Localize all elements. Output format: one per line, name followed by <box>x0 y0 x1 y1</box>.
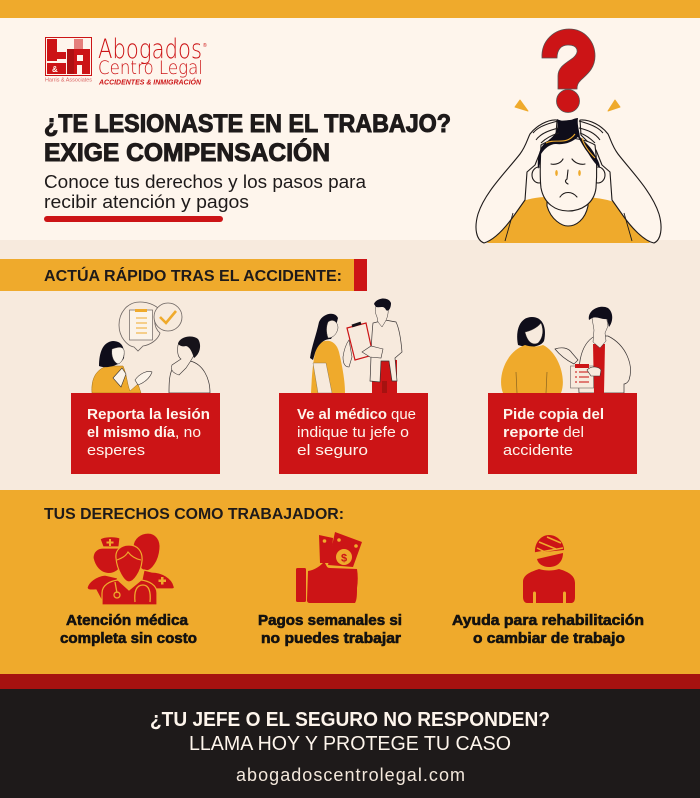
label <box>60 613 197 647</box>
logo: Abogados Centro Legal: Harris & Associates <box>45 78 93 84</box>
label: completa sin costo <box>60 631 197 647</box>
icon: person with bandaged head <box>523 535 575 603</box>
step card: el seguro <box>297 442 368 459</box>
arms <box>476 120 661 243</box>
step card: indique tu jefe o <box>297 424 409 441</box>
step card <box>488 393 637 474</box>
report clipboard <box>570 366 594 388</box>
subtitle: recibir atención y pagos <box>44 192 249 212</box>
title: ¿TE LESIONASTE EN EL TRABAJO? <box>44 110 451 138</box>
logo: Abogados Centro Legal <box>45 34 207 86</box>
step card: del <box>563 424 584 441</box>
step card: el mismo día <box>87 424 176 441</box>
logo: Abogados Centro Legal: ® <box>203 42 207 49</box>
label: Atención médica <box>66 613 189 629</box>
logo: Abogados Centro Legal: Centro Legal <box>98 57 203 79</box>
fingers <box>505 121 632 241</box>
illustration: woman and doctor with clipboard <box>310 299 402 393</box>
tears <box>555 170 581 176</box>
doctor <box>579 336 630 393</box>
right 2: weekly payments <box>258 532 402 647</box>
label: Ayuda para rehabilitación <box>452 613 644 629</box>
illustration: patient and doctor with report <box>501 307 630 393</box>
ears, neck and face <box>532 138 605 226</box>
doctor <box>372 360 397 393</box>
step card: Pide copia del <box>503 406 604 423</box>
subtitle <box>44 172 367 212</box>
clipboard <box>347 323 373 360</box>
right 1: medical care <box>60 533 197 647</box>
icon: alert marks <box>515 100 620 111</box>
title <box>44 110 451 167</box>
label: Pagos semanales si <box>258 613 402 629</box>
speech bubble <box>119 302 160 351</box>
step 2: see the doctor <box>279 299 428 474</box>
step card <box>279 393 428 474</box>
illustration: worried man with question mark <box>476 29 661 243</box>
woman <box>92 366 141 393</box>
right 2: weekly payments: $ <box>341 552 347 564</box>
icon: fist with banknotes <box>296 532 362 603</box>
icon: medical team <box>87 533 174 605</box>
step card: esperes <box>87 442 145 459</box>
label: o cambiar de trabajo <box>473 631 625 647</box>
label <box>452 613 644 647</box>
illustration: woman talking to man <box>92 302 210 393</box>
hair <box>538 118 600 169</box>
subtitle underline <box>44 216 223 222</box>
subtitle: Conoce tus derechos y los pasos para <box>44 172 367 192</box>
footer call to action: abogadoscentrolegal.com <box>236 765 465 785</box>
footer call to action: ¿TU JEFE O EL SEGURO NO RESPONDEN? <box>150 709 550 731</box>
label: no puedes trabajar <box>261 631 401 647</box>
step card <box>71 393 220 474</box>
man <box>169 361 210 393</box>
step card: accidente <box>503 442 573 459</box>
footer call to action <box>150 709 550 785</box>
logo: Abogados Centro Legal: Abogados <box>98 34 202 65</box>
step card: Reporta la lesión <box>87 406 210 423</box>
title: EXIGE COMPENSACIÓN <box>44 137 330 167</box>
step card: , no <box>175 424 201 441</box>
heading: worker rights: TUS DERECHOS COMO TRABAJADOR: <box>44 506 344 523</box>
shirt <box>487 197 650 243</box>
icon: question mark <box>542 29 595 112</box>
logo: Abogados Centro Legal: ACCIDENTES & INMIGRACIÓN <box>98 78 202 86</box>
logo: Abogados Centro Legal: & <box>52 65 58 74</box>
right 3: rehabilitation <box>452 535 644 647</box>
heading bar: act fast <box>0 259 367 291</box>
hair highlights <box>546 134 595 158</box>
step card: Ve al médico <box>297 406 387 423</box>
clipboard <box>130 310 152 340</box>
heading bar: act fast: ACTÚA RÁPIDO TRAS EL ACCIDENTE: <box>44 266 342 285</box>
woman <box>311 341 345 393</box>
check bubble <box>154 303 182 331</box>
label <box>258 613 402 647</box>
step 1: report the injury <box>71 302 220 474</box>
woman <box>517 317 545 347</box>
step card: reporte <box>503 424 559 441</box>
step 3: request a copy of the report <box>488 307 637 474</box>
face details <box>551 159 585 197</box>
footer call to action: LLAMA HOY Y PROTEGE TU CASO <box>189 733 511 755</box>
step card: que <box>391 406 416 423</box>
